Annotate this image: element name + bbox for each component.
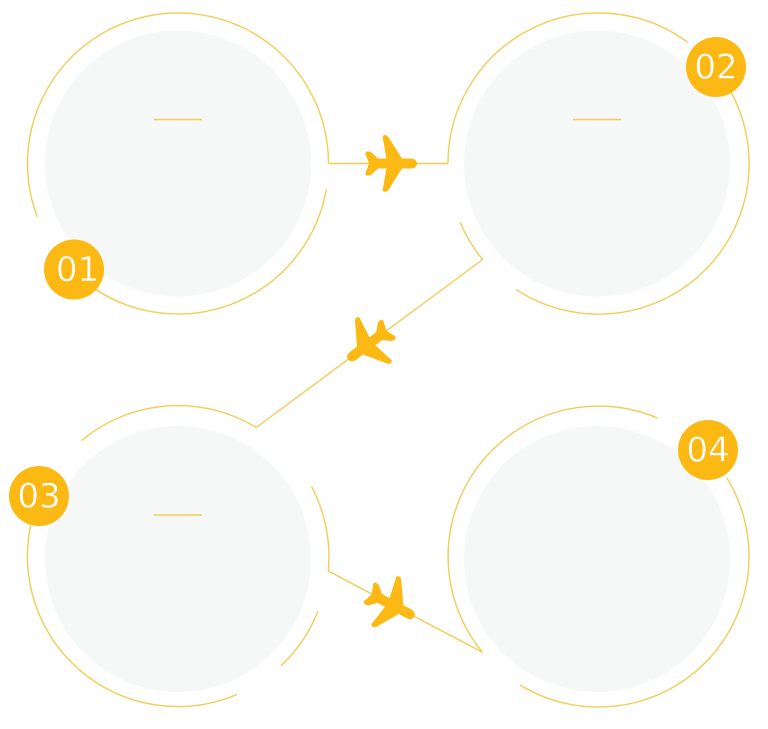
- placeholder dash 01: [154, 118, 202, 120]
- badge 01: [44, 240, 104, 300]
- grey disc 04: [464, 426, 730, 692]
- panel: step 01: [27, 13, 328, 314]
- icon: airplane 3: [355, 567, 428, 642]
- outline ring 04: [448, 406, 749, 707]
- badge 04: [678, 420, 738, 480]
- icon: airplane 2: [331, 306, 406, 382]
- badge 02: [686, 37, 746, 97]
- outline ring 03: [27, 406, 329, 707]
- badge 03: [9, 466, 69, 526]
- placeholder dash 03: [154, 514, 202, 516]
- badge 03: 03: [17, 476, 61, 516]
- icon: airplane 1: [365, 135, 417, 192]
- outline ring 02: [448, 13, 749, 314]
- grey disc 02: [464, 30, 730, 296]
- badge 04: 04: [686, 430, 730, 470]
- panel: step 02: [448, 13, 749, 314]
- connector: step 02 to 03 with plane: [256, 260, 483, 428]
- connector line 2: [256, 260, 483, 428]
- grey disc 03: [45, 426, 311, 692]
- connector: step 03 to 04 with plane: [328, 567, 482, 652]
- badge 02: 02: [694, 48, 738, 88]
- connector line 3: [328, 571, 482, 652]
- panel: step 04: [448, 406, 749, 707]
- connector: step 01 to 02 with plane: [328, 135, 448, 192]
- panel: step 03: [9, 406, 329, 707]
- grey disc 01: [45, 30, 311, 296]
- badge 01: 01: [56, 250, 99, 290]
- connector line 1: [328, 162, 448, 164]
- outline ring 01: [27, 13, 328, 314]
- placeholder dash 02: [573, 118, 621, 120]
